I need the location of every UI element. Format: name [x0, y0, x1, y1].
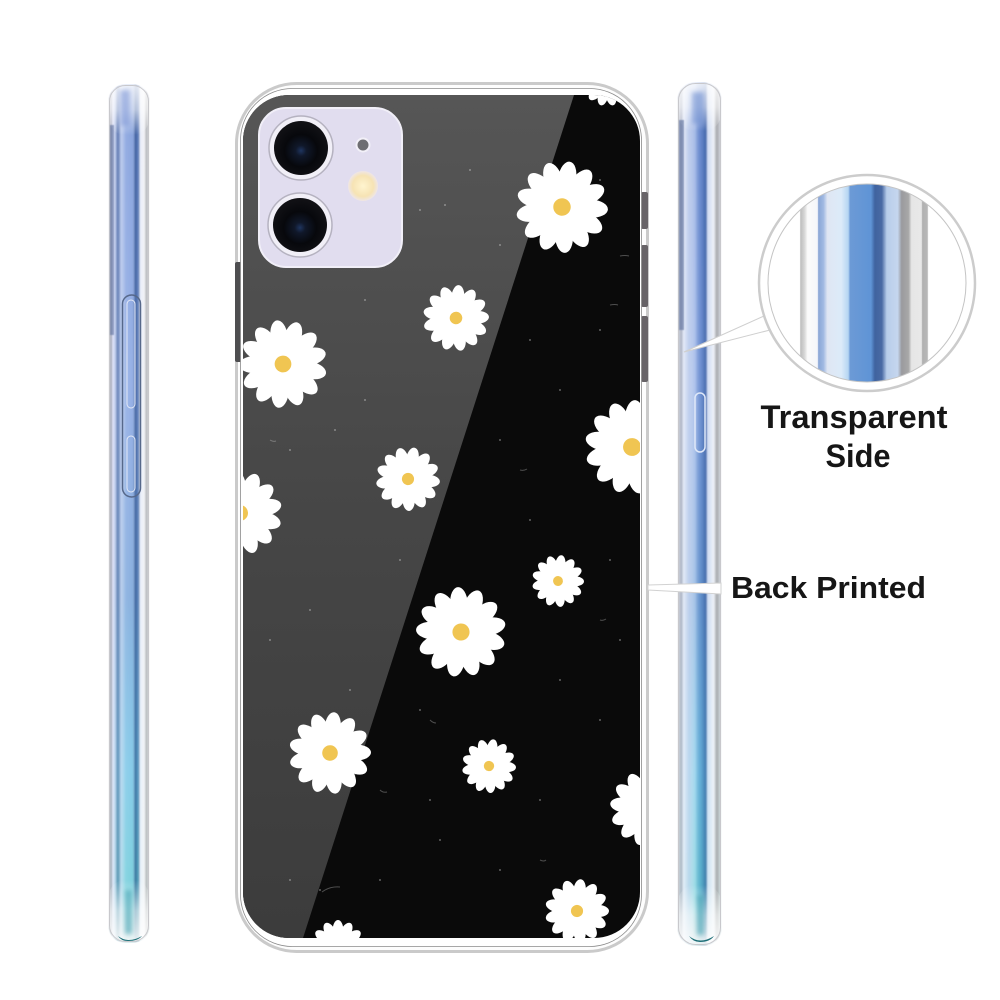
microphone — [356, 138, 370, 152]
callout: transparent side magnifier — [684, 175, 975, 391]
label: Back Printed: Back Printed — [731, 570, 926, 605]
clear case frame — [236, 84, 648, 952]
phone case back — [235, 82, 649, 953]
specks — [269, 169, 621, 891]
label: Transparent Side: Side — [826, 438, 890, 474]
side keys seen through the case — [235, 192, 648, 382]
magnifier ring — [759, 175, 975, 391]
right side view of phone case — [678, 83, 721, 945]
daisies — [243, 95, 640, 938]
left side view of phone case — [109, 85, 149, 942]
label: Transparent Side — [760, 399, 948, 474]
printed back panel — [243, 95, 640, 938]
side button — [695, 393, 705, 452]
pointer to case edge — [684, 316, 770, 352]
callout: back printed pointer — [648, 583, 721, 594]
bottom lens — [268, 193, 332, 257]
label: Transparent Side: Transparent — [760, 399, 948, 435]
magnified stripes — [800, 184, 928, 382]
top lens — [269, 116, 333, 180]
camera module — [259, 108, 402, 267]
side buttons — [122, 295, 140, 497]
flash — [348, 171, 378, 201]
